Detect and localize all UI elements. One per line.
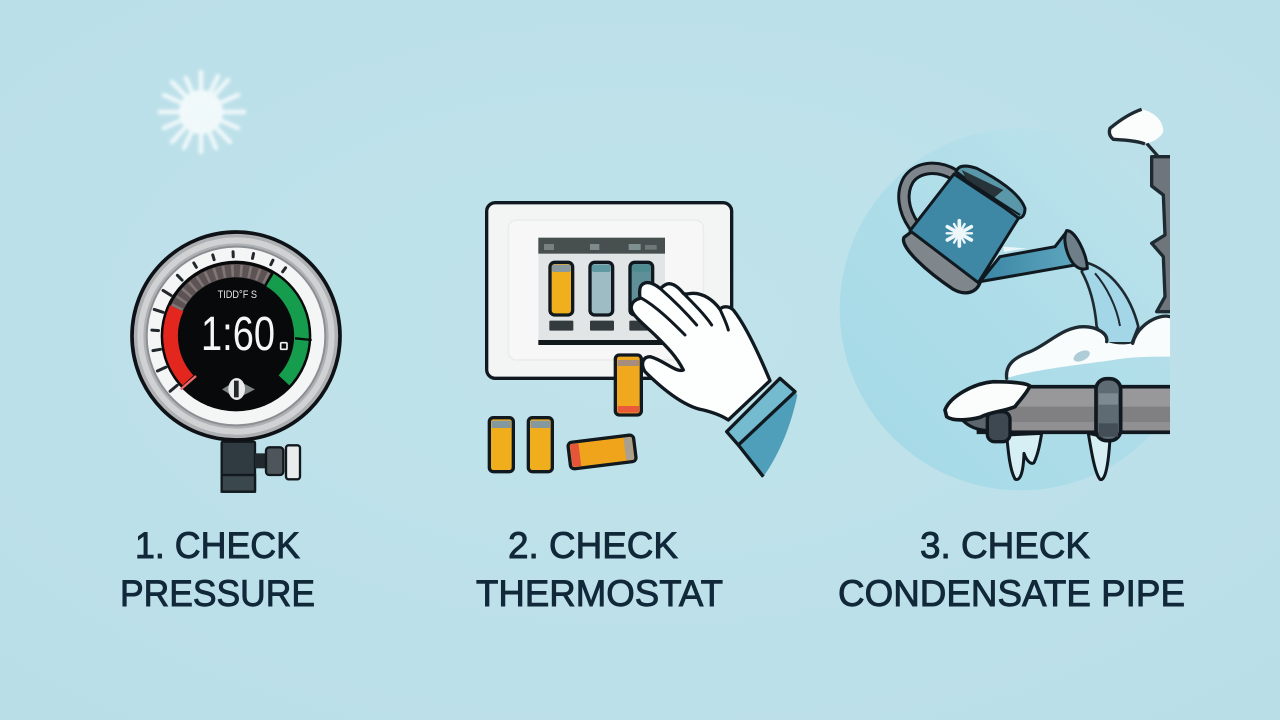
heading: step 3: 3. CHECK [920, 525, 1090, 566]
can rim [956, 166, 1025, 218]
sleeve [727, 378, 797, 477]
pipe clamp left [987, 412, 1010, 442]
loose battery middle [528, 418, 552, 472]
panel: check condensate pipe [840, 109, 1202, 490]
heading: step 2: 2. CHECK [508, 525, 678, 566]
gauge small label: TIDD°F S [218, 289, 257, 301]
snowflake on can [947, 221, 972, 246]
dial ticks [152, 252, 286, 391]
loose battery centre [615, 355, 641, 415]
can base [903, 232, 980, 293]
gauge unit box [281, 343, 287, 349]
panel: check thermostat [487, 203, 797, 477]
horizontal pipe [962, 379, 1177, 442]
gauge red zone [171, 308, 188, 380]
loose battery left [489, 418, 513, 472]
heading: step 1 [120, 525, 315, 614]
heading: step 3 [838, 525, 1185, 614]
gauge reading: 1:60 [201, 307, 275, 361]
icicles [1007, 433, 1110, 480]
thermostat sliders [549, 262, 653, 331]
hand [631, 283, 770, 420]
watering can [903, 166, 1087, 293]
heading: step 1: PRESSURE [120, 573, 315, 614]
heading: step 1: 1. CHECK [135, 525, 300, 566]
snow drift [1007, 316, 1170, 378]
gauge green zone [270, 280, 301, 380]
gauge dial [132, 232, 340, 440]
can body [910, 174, 1019, 283]
panel: check pressure gauge [132, 232, 340, 492]
heading: step 2: THERMOSTAT [476, 573, 723, 614]
loose battery tipped over [568, 435, 636, 469]
gauge base and valve [222, 442, 300, 492]
heading: step 3: CONDENSATE PIPE [838, 573, 1185, 614]
gauge bottom logo [222, 378, 255, 400]
can spout [980, 232, 1075, 282]
icon: snowflake sun [160, 72, 244, 152]
heading: step 2 [476, 525, 723, 614]
can handle [904, 168, 955, 225]
snow on pipe end [945, 382, 1030, 420]
thermostat panel [487, 203, 732, 378]
pipe clamp right [1096, 379, 1121, 441]
water stream [1082, 263, 1138, 343]
gauge grey zone [177, 271, 268, 308]
snow cap on wall pipe [1110, 109, 1163, 143]
backdrop circle [840, 134, 1170, 490]
wall pipe [1152, 157, 1173, 312]
